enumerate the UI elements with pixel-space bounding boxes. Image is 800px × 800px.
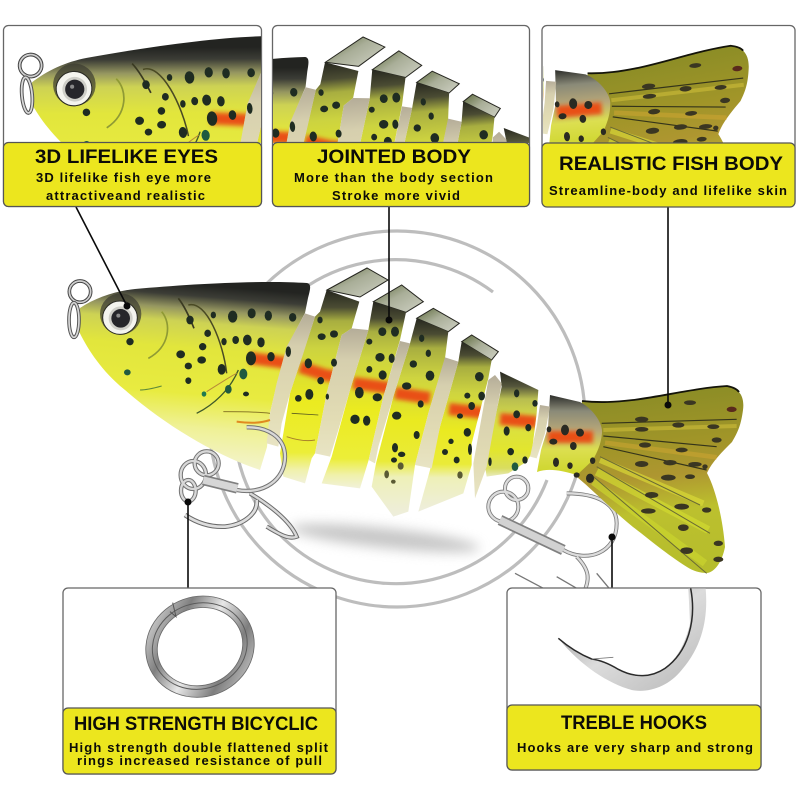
panel image: fish head close-up bbox=[17, 0, 737, 356]
head bbox=[77, 282, 310, 470]
tail fin bbox=[577, 386, 743, 573]
description: Hooks are very sharp and strong bbox=[517, 740, 753, 755]
nose rings bbox=[69, 281, 91, 337]
heading: REALISTIC FISH BODY bbox=[559, 154, 783, 175]
tail rays bbox=[593, 419, 737, 573]
panel image: jointed segments close-up bbox=[68, 4, 762, 365]
leader line: jointed body bbox=[386, 207, 392, 324]
panel: realistic fish body bbox=[541, 24, 796, 208]
heading: TREBLE HOOKS bbox=[561, 713, 707, 734]
yellow caption box bbox=[63, 708, 336, 774]
treble hook: front, back prongs bbox=[185, 493, 297, 538]
description: 3D lifelike fish eye more bbox=[36, 170, 211, 185]
description: attractiveand realistic bbox=[46, 188, 205, 203]
eye bbox=[100, 293, 141, 335]
heading: JOINTED BODY bbox=[317, 147, 471, 168]
tail spots bbox=[547, 400, 737, 562]
orange lateral stripe bbox=[250, 358, 593, 437]
head spots bbox=[124, 308, 296, 397]
description: Streamline-body and lifelike skin bbox=[549, 183, 787, 198]
heading: HIGH STRENGTH BICYCLIC bbox=[74, 714, 318, 735]
panel: jointed body bbox=[272, 24, 530, 208]
panel: 3D lifelike eyes bbox=[2, 24, 262, 208]
tail top edge bbox=[582, 386, 739, 402]
yellow caption box bbox=[4, 142, 262, 206]
top fins bbox=[327, 268, 498, 360]
segment spots bbox=[295, 317, 538, 484]
yellow caption box bbox=[272, 142, 530, 206]
body segments bbox=[280, 290, 538, 517]
yellow caption box bbox=[542, 143, 795, 207]
background circle rings bbox=[209, 231, 585, 607]
split ring image bbox=[139, 588, 261, 705]
panel image: tail close-up bbox=[65, 0, 763, 290]
jointed fish lure bbox=[69, 268, 743, 573]
description: Stroke more vivid bbox=[332, 188, 460, 203]
treble hook: front, visible prong and rings bbox=[181, 427, 285, 501]
leader line: fish body bbox=[664, 207, 672, 408]
yellow caption box bbox=[507, 705, 761, 770]
leader line: eyes bbox=[76, 207, 130, 310]
fish shadow bbox=[289, 518, 481, 558]
beige joint strips bbox=[267, 313, 550, 498]
leader line: split ring bbox=[184, 498, 192, 588]
leader line: treble hook bbox=[608, 534, 616, 588]
description: rings increased resistance of pull bbox=[77, 753, 322, 768]
heading: 3D LIFELIKE EYES bbox=[35, 147, 218, 168]
hook image bbox=[558, 588, 706, 691]
panel: treble hooks bbox=[507, 588, 761, 770]
gill and cheek marks bbox=[140, 298, 318, 441]
treble hook: rear, back prongs and rings bbox=[488, 477, 617, 593]
tail knuckle bbox=[537, 395, 602, 475]
description: High strength double flattened split bbox=[69, 740, 329, 755]
description: More than the body section bbox=[294, 170, 493, 185]
panel: high strength bicyclic bbox=[63, 588, 336, 774]
